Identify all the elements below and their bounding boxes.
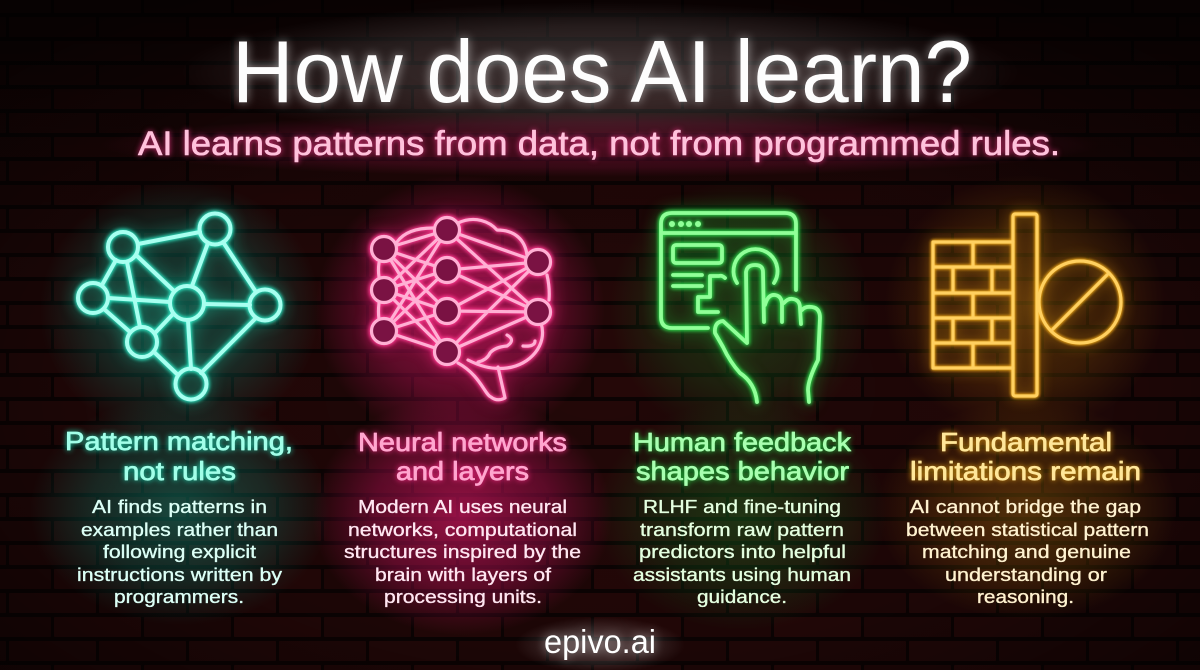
heading: human feedback: shapes behavior bbox=[636, 456, 849, 486]
icon: network graph bbox=[78, 214, 280, 400]
body text: pattern matching: instructions written by bbox=[77, 564, 283, 585]
body text: human feedback: RLHF and fine-tuning bbox=[643, 496, 841, 517]
heading: neural networks: Neural networks bbox=[358, 427, 567, 457]
body text: fundamental limitations: understanding or bbox=[945, 564, 1107, 585]
body text: fundamental limitations: reasoning. bbox=[977, 586, 1074, 607]
icon: browser window with tapping hand bbox=[661, 213, 820, 402]
body text: pattern matching: programmers. bbox=[114, 586, 244, 607]
body text: fundamental limitations: AI cannot bridge the gap bbox=[910, 496, 1141, 517]
body text: neural networks bbox=[344, 496, 581, 607]
heading: pattern matching: not rules bbox=[123, 456, 236, 486]
body text: human feedback: predictors into helpful bbox=[639, 541, 846, 562]
panel: human feedback bbox=[633, 427, 852, 607]
body text: human feedback: transform raw pattern bbox=[640, 519, 844, 540]
body text: pattern matching: examples rather than bbox=[81, 519, 278, 540]
heading: neural networks: and layers bbox=[396, 456, 529, 486]
heading: fundamental limitations bbox=[910, 427, 1141, 486]
heading: human feedback: Human feedback bbox=[633, 427, 852, 457]
heading: fundamental limitations: Fundamental bbox=[940, 427, 1112, 457]
panel: neural networks bbox=[344, 427, 581, 607]
icon: brick wall and prohibition sign bbox=[933, 214, 1121, 396]
body text: neural networks: Modern AI uses neural bbox=[358, 496, 567, 517]
body text: human feedback: assistants using human bbox=[633, 564, 851, 585]
heading: pattern matching bbox=[65, 426, 293, 486]
title: How does AI learn? bbox=[232, 22, 972, 121]
body text: pattern matching: AI finds patterns in bbox=[92, 496, 267, 517]
body text: neural networks: processing units. bbox=[384, 586, 542, 607]
body text: fundamental limitations: matching and genuine bbox=[922, 541, 1131, 562]
body text: pattern matching: following explicit bbox=[103, 541, 256, 562]
heading: neural networks bbox=[358, 427, 567, 486]
footer brand: epivo.ai bbox=[544, 623, 656, 660]
body text: neural networks: brain with layers of bbox=[375, 564, 552, 585]
heading: pattern matching: Pattern matching, bbox=[65, 426, 293, 456]
body text: human feedback bbox=[633, 496, 851, 607]
body text: neural networks: structures inspired by the bbox=[344, 541, 581, 562]
panel: pattern matching bbox=[65, 426, 293, 607]
body text: neural networks: networks, computational bbox=[348, 519, 577, 540]
heading: human feedback bbox=[633, 427, 852, 486]
icon: neural network brain bbox=[372, 218, 550, 400]
body text: fundamental limitations: between statistical pattern bbox=[906, 519, 1149, 540]
body text: pattern matching bbox=[77, 496, 283, 607]
body text: fundamental limitations bbox=[906, 496, 1149, 607]
body text: human feedback: guidance. bbox=[697, 586, 787, 607]
subtitle: AI learns patterns from data, not from programmed rules. bbox=[138, 125, 1060, 163]
panel: fundamental limitations bbox=[906, 427, 1149, 607]
heading: fundamental limitations: limitations remain bbox=[910, 456, 1141, 486]
